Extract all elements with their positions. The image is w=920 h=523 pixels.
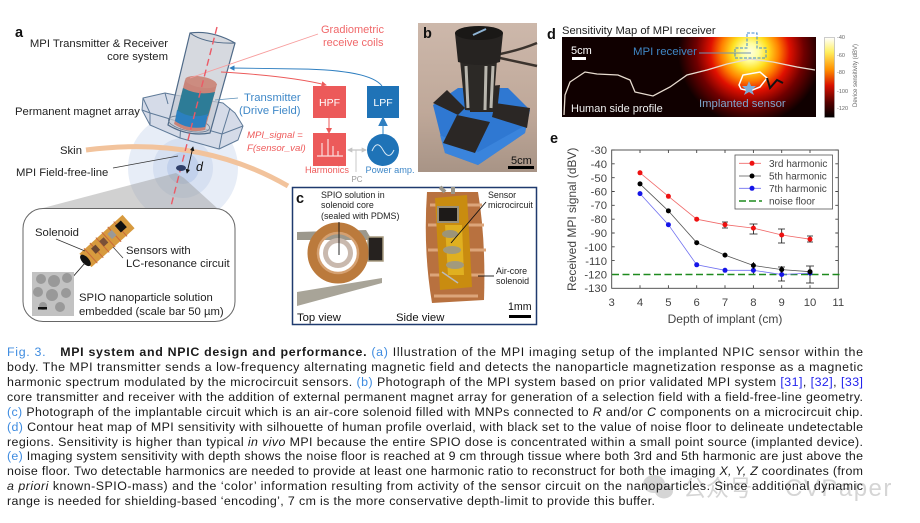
core system label: MPI Transmitter & Receiver — [30, 38, 168, 50]
solenoid device — [76, 214, 135, 270]
LPF block — [367, 86, 399, 118]
x tick labels: 11 — [832, 297, 844, 309]
transmitter label: (Drive Field) — [239, 105, 301, 117]
x tick labels: 3 — [609, 297, 615, 309]
implant outline — [739, 72, 783, 91]
y tick labels: -30 — [591, 145, 607, 157]
y tick labels: -130 — [584, 283, 607, 295]
x tick labels: 10 — [804, 297, 816, 309]
figure caption: (e) Imaging system sensitivity with depth shows the noise floor is reached at 9 cm through tissue where both 3rd and 5th harmonic are just above the — [7, 449, 863, 463]
photo background — [418, 23, 537, 172]
x tick labels — [609, 297, 844, 309]
panel letter c: c — [296, 191, 304, 207]
MPI transmitter and receiver cylinder — [167, 32, 235, 135]
receiver dashed outline — [735, 33, 766, 58]
y axis title: Received MPI signal (dBV) — [565, 148, 579, 291]
PC link — [348, 150, 366, 172]
transmitter label: Transmitter — [244, 92, 301, 104]
gradiometric coil line — [190, 34, 318, 78]
panel letter e: e — [550, 131, 558, 147]
legend: 5th harmonic — [769, 171, 827, 182]
x axis title: Depth of implant (cm) — [668, 312, 782, 326]
black magnet plates — [433, 85, 530, 153]
sensors leader — [113, 247, 123, 258]
colour bar: -40 — [837, 35, 845, 41]
HPF block — [313, 86, 346, 118]
scale bar 1mm: 1mm — [508, 301, 532, 313]
y tick labels: -50 — [591, 173, 607, 185]
legend: 3rd harmonic — [769, 159, 827, 170]
scale bar 5cm: 5cm — [511, 155, 532, 167]
legend — [735, 155, 832, 209]
nanoparticle leader — [71, 263, 85, 279]
x tick labels: 8 — [750, 297, 757, 309]
core system label: core system — [107, 51, 168, 63]
inset box — [23, 208, 235, 322]
figure caption: a priori known-SPIO-mass) and the ‘color’ information resulting from activity of the sensor circuit on the nanoparticles. Since additional dynamic — [7, 479, 863, 493]
x tick labels: 7 — [722, 297, 728, 309]
watermark: 公众号 — [683, 469, 752, 503]
heat map — [562, 37, 816, 117]
sensors label: Sensors with — [126, 245, 191, 257]
x tick labels: 9 — [779, 297, 785, 309]
colour bar: Device sensitivity (dBV) — [853, 44, 859, 107]
top view label: Top view — [297, 312, 342, 324]
noise floor line — [612, 274, 840, 276]
SPIO core label: (sealed with PDMS) — [321, 211, 399, 221]
figure caption — [7, 345, 863, 508]
implant star — [742, 81, 756, 95]
nanoparticle label: embedded (scale bar 50 µm) — [79, 306, 224, 318]
sensors label: LC-resonance circuit — [126, 258, 230, 270]
side view label: Side view — [396, 312, 445, 324]
sensor microcircuit label: microcircuit — [488, 200, 533, 210]
x tick labels: 4 — [637, 297, 643, 309]
air-core solenoid label: solenoid — [496, 276, 529, 286]
skin label: Skin — [60, 145, 82, 157]
LPF block: LPF — [373, 97, 393, 109]
side view photo — [426, 187, 494, 303]
PC label: PC — [351, 175, 363, 184]
y tick labels: -100 — [584, 242, 607, 254]
permanent magnet array — [142, 93, 243, 149]
zoom wedge — [43, 173, 217, 208]
panel letter b: b — [423, 26, 432, 42]
blue hexagonal base — [433, 88, 530, 165]
scale bar 5cm: 5cm — [571, 45, 592, 57]
panel e: depth chart — [550, 131, 844, 326]
y tick labels — [584, 145, 607, 295]
watermark — [643, 469, 893, 503]
amplifier to LPF arrow — [382, 118, 384, 134]
y tick labels: -80 — [591, 214, 607, 226]
series: 3rd harmonic — [638, 170, 813, 243]
plot frame and ticks — [612, 150, 838, 288]
frame — [292, 188, 536, 324]
y tick labels: -40 — [591, 159, 607, 171]
y tick labels: -90 — [591, 228, 607, 240]
skin arc — [86, 147, 288, 186]
figure caption: body. The MPI transmitter sends a low-frequency alternating magnetic field and detects the nanoparticle magnetization response as a magnetic — [7, 360, 863, 374]
receiver label: MPI receiver — [633, 46, 697, 58]
panel d: sensitivity map — [548, 26, 858, 118]
nanoparticle label: SPIO nanoparticle solution — [79, 292, 213, 304]
figure caption: range is needed for shielding-based ‘encoding’, 7 cm is the more conservative depth-limit to provide this buffer. — [7, 494, 655, 508]
colour bar — [824, 35, 859, 118]
series: 7th harmonic — [638, 191, 814, 283]
harmonics label: Harmonics — [305, 165, 349, 175]
panel c: implant photographs — [292, 187, 536, 324]
column — [460, 60, 497, 112]
cables — [500, 43, 537, 66]
panel a: MPI system illustration — [15, 24, 415, 322]
harmonics block — [313, 133, 346, 166]
nanoparticle micrograph — [32, 272, 74, 316]
colour bar: -100 — [837, 89, 848, 95]
inner transmitter coil — [174, 74, 218, 131]
colour bar: -120 — [837, 106, 848, 112]
map title: Sensitivity Map of MPI receiver — [562, 25, 716, 37]
figure caption: (d) Contour heat map of MPI sensitivity with silhouette of human profile overlaid, with black set to the value of noise floor to delineate undetectable — [7, 420, 863, 434]
SPIO core label: SPIO solution in — [321, 190, 385, 200]
y tick labels: -60 — [591, 186, 607, 198]
sensor microcircuit label: Sensor — [488, 190, 516, 200]
magnet label: Permanent magnet array — [15, 106, 140, 118]
depth arrow d — [187, 147, 193, 173]
inset: solenoid sensor — [23, 208, 235, 322]
solenoid label: Solenoid — [35, 227, 79, 239]
profile label: Human side profile — [571, 103, 663, 115]
figure caption: core transmitter and receiver with the addition of external permanent magnet array for generation of a selection field with a field-free-line geometry. — [7, 390, 863, 404]
power amp label: Power amp. — [365, 165, 415, 175]
signal equation: MPI_signal = — [247, 130, 303, 141]
axis dashed line — [170, 27, 217, 210]
implanted sensor label: Implanted sensor — [699, 98, 786, 110]
panel letter a: a — [15, 25, 24, 41]
black receiver head — [455, 26, 503, 65]
top view photo — [297, 222, 383, 306]
legend: noise floor — [769, 196, 816, 207]
figure caption: noise floor. Two detectable harmonics are needed to provide at least one harmonic ratio to reconstruct for both the imaging X, Y, Z coordinates (from — [7, 464, 863, 478]
colour bar: -80 — [837, 70, 845, 76]
y tick labels: -110 — [585, 256, 607, 268]
y tick labels: -70 — [591, 200, 607, 212]
x tick labels: 6 — [694, 297, 700, 309]
transmitter leader line — [215, 98, 238, 100]
figure caption: regions. Sensitivity is higher than typical in vivo MPI because the entire SPIO dose is concentrated within a small point source (implanted device). — [7, 435, 863, 449]
watermark: CVPaper — [785, 475, 893, 502]
field-free-line label: MPI Field-free-line — [16, 167, 108, 179]
power amplifier icon — [367, 134, 399, 166]
human profile line — [564, 59, 815, 115]
gradiometric label: Gradiometric — [321, 24, 384, 36]
signal lines to filters — [221, 68, 382, 86]
figure caption: Fig. 3. MPI system and NPIC design and performance. (a) Illustration of the MPI imaging setup of the implanted NPIC sensor within the — [7, 345, 863, 359]
figure caption: harmonic spectrum modulated by the microcircuit sensors. (b) Photograph of the MPI system based on prior validated MPI system [31], [32], [33] — [7, 375, 863, 389]
scale bar 5cm — [508, 155, 534, 169]
legend: 7th harmonic — [769, 184, 827, 195]
field-free-line leader — [113, 156, 178, 168]
HPF block: HPF — [319, 97, 340, 109]
receiver leader — [699, 52, 751, 54]
y tick labels: -120 — [584, 270, 607, 282]
x tick labels: 5 — [665, 297, 672, 309]
SPIO core label: solenoid core — [321, 200, 374, 210]
field-of-view circles — [128, 113, 238, 223]
implant marker — [176, 165, 186, 171]
solenoid leader — [56, 239, 85, 251]
panel letter d: d — [547, 27, 556, 43]
signal equation: F(sensor_val) — [247, 143, 306, 154]
HPF to harmonics arrow — [328, 118, 330, 133]
figure caption: (c) Photograph of the implantable circuit which is an air-core solenoid filled with MNPs connected to R and/or C components on a microcircuit chip. — [7, 405, 863, 419]
depth label d: d — [196, 160, 204, 174]
series: 5th harmonic — [638, 181, 812, 276]
air-core solenoid label: Air-core — [496, 266, 527, 276]
panel b: MPI system photograph — [418, 23, 537, 172]
gradiometric label: receive coils — [323, 37, 384, 49]
colour bar: -60 — [837, 53, 845, 59]
